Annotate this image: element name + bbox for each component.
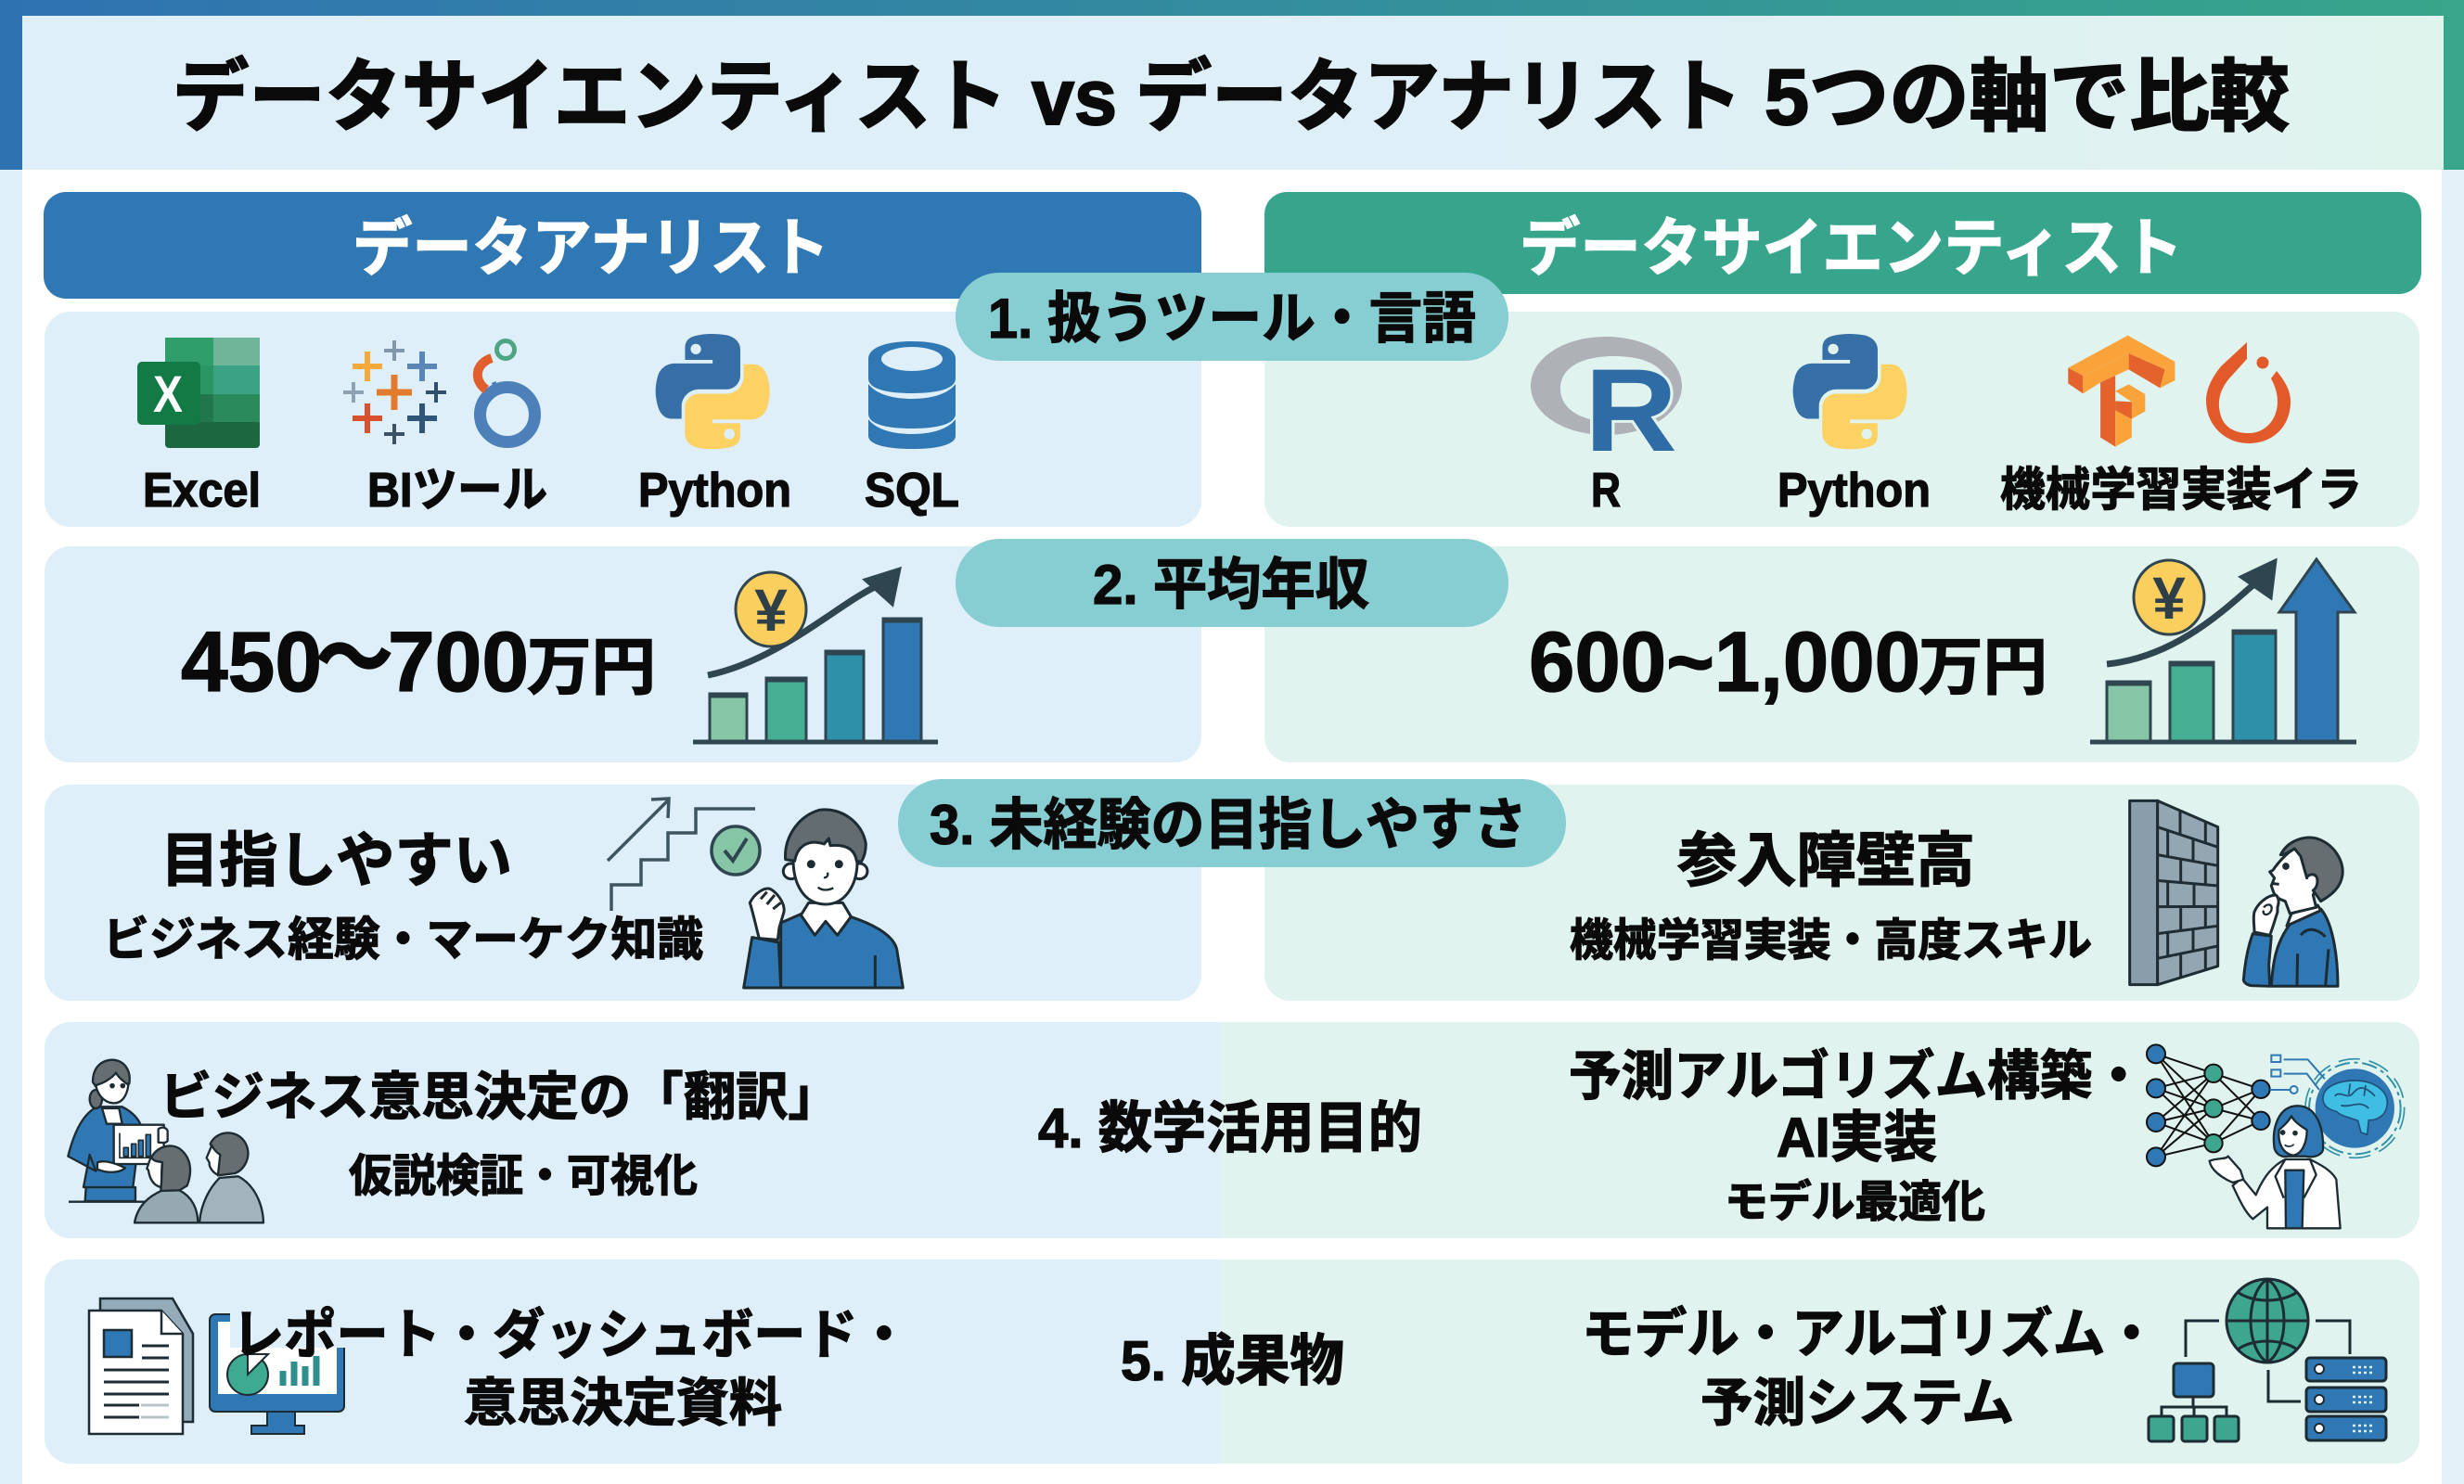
axis pill 2: average salary xyxy=(956,539,1508,627)
icon: neural network xyxy=(2147,1044,2270,1166)
icon: growth chart with arrow and yen coin xyxy=(2090,559,2356,742)
row 3 panel: analyst accessibility xyxy=(45,785,1201,1001)
axis pill 3: accessibility for beginners xyxy=(898,779,1566,867)
heading: decision materials: 意思決定資料 xyxy=(464,1374,782,1432)
row 2 panel: scientist salary xyxy=(1264,546,2419,762)
row 4 panel xyxy=(45,1022,2419,1238)
title banner xyxy=(0,0,2464,170)
label: Python: Python xyxy=(1777,464,1931,518)
label: Python: Python xyxy=(638,464,791,518)
heading: AI implementation: AI実装 xyxy=(1777,1107,1937,1169)
subtext: machine learning skills: 機械学習実装・高度スキル xyxy=(1570,916,2092,966)
icon: BI tools xyxy=(343,340,534,444)
icon: Excel xyxy=(137,338,260,448)
icon: TensorFlow xyxy=(2068,336,2175,447)
icon: Python xyxy=(656,334,770,449)
column header: data analyst xyxy=(44,192,1201,299)
icon: thinking person xyxy=(2243,838,2342,986)
icon: SQL database xyxy=(868,341,956,449)
salary figure: 600~1,000 xyxy=(1529,615,1920,710)
heading: report dashboard: レポート・ダッシュボード・ xyxy=(232,1305,910,1365)
salary figure: ～ xyxy=(315,612,393,707)
axis pill 3: accessibility for beginners: 3. 未経験の目指しやすさ xyxy=(930,794,1527,856)
label: machine learning implementation: 機械学習実装イラ xyxy=(2000,464,2362,516)
heading: high entry barrier: 参入障壁高 xyxy=(1677,827,1975,894)
icon: documents xyxy=(89,1298,193,1434)
salary figure: 450 xyxy=(181,615,322,710)
icon: R logo xyxy=(1531,337,1682,476)
icon: growth chart with arrow and yen coin: ¥ xyxy=(2152,565,2186,632)
column header: data analyst: データアナリスト xyxy=(353,213,829,284)
heading: prediction system: 予測システム xyxy=(1700,1374,2014,1432)
row 5 panel xyxy=(45,1260,2419,1464)
label: SQL: SQL xyxy=(865,464,959,518)
icon: dashboard monitor xyxy=(210,1303,346,1434)
title text: 5つの軸で比較 xyxy=(1765,54,2290,142)
axis label 4: 4. 数学活用目的 xyxy=(1038,1097,1422,1159)
heading: predictive algorithms: 予測アルゴリズム構築・ xyxy=(1569,1046,2145,1107)
icon: AI brain xyxy=(2270,1055,2405,1158)
row 3 panel: scientist accessibility xyxy=(1264,785,2419,1001)
icon: growth chart with yen coin xyxy=(693,569,938,742)
salary figure xyxy=(181,612,656,710)
salary figure: 700 xyxy=(388,615,529,710)
icon: presenter and audience xyxy=(68,1060,263,1222)
axis label 5: 5. 成果物 xyxy=(1121,1330,1344,1392)
subtext: business experience: ビジネス経験・マーケク知識 xyxy=(103,914,703,966)
label: R: R xyxy=(1591,464,1621,518)
heading: easy to aim for: 目指しやすい xyxy=(160,827,512,894)
label: Excel: Excel xyxy=(143,464,261,518)
salary figure: 万円 xyxy=(527,633,656,703)
icon: scientist xyxy=(2210,1106,2341,1228)
axis pill 2: average salary: 2. 平均年収 xyxy=(1093,554,1369,616)
row 2 panel: analyst salary xyxy=(45,546,1201,762)
icon: stairs with check xyxy=(608,799,760,911)
salary figure: 万円 xyxy=(1919,633,2047,703)
subtext: hypothesis: 仮説検証・可視化 xyxy=(349,1152,698,1201)
heading: model algorithm: モデル・アルゴリズム・ xyxy=(1582,1304,2158,1364)
icon: network system xyxy=(2149,1279,2386,1441)
icon: PyTorch xyxy=(2206,342,2291,443)
icon: smiling person xyxy=(744,810,903,988)
title text: データアナリスト xyxy=(1136,54,1742,142)
row 1 panel: analyst tools xyxy=(45,312,1201,527)
label: BI tools: BIツール xyxy=(367,464,547,518)
row 1 panel: scientist tools xyxy=(1264,312,2419,527)
icon: Excel: X xyxy=(153,365,183,423)
title text: データサイエンティスト xyxy=(173,54,1007,142)
icon: brick wall xyxy=(2130,800,2218,985)
heading: business translation: ビジネス意思決定の「翻訳」 xyxy=(160,1068,841,1126)
icon: R logo: R xyxy=(1585,344,1677,476)
column header: data scientist: データサイエンティスト xyxy=(1520,213,2183,284)
subtext: model optimization: モデル最適化 xyxy=(1725,1177,1985,1226)
icon: Python xyxy=(1793,334,1907,449)
axis pill 1: tools and languages xyxy=(956,273,1508,361)
icon: growth chart with yen coin: ¥ xyxy=(754,577,788,644)
title text: vs xyxy=(1032,54,1117,142)
column header: data scientist xyxy=(1264,192,2421,294)
axis pill 1: tools and languages: 1. 扱うツール・言語 xyxy=(988,288,1476,350)
